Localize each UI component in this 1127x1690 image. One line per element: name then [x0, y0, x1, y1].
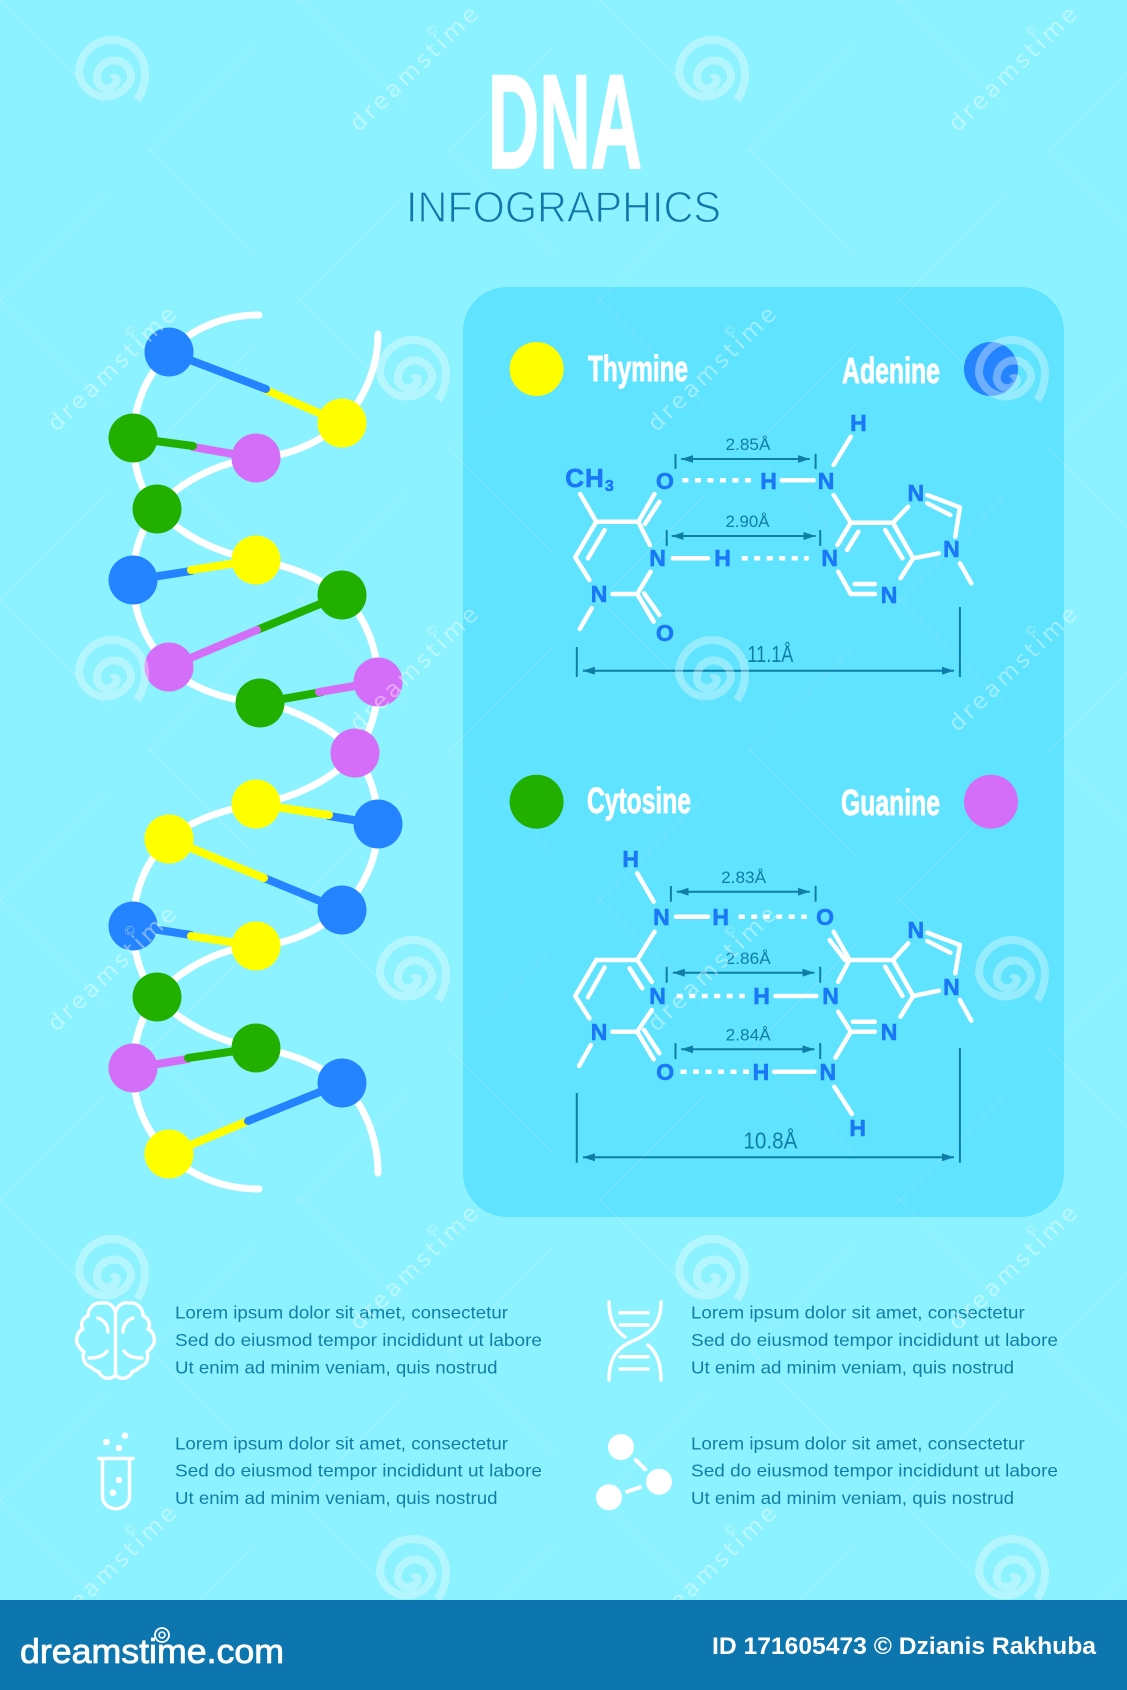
icon: molecule: [596, 1434, 672, 1510]
footer logo: dreamstime.com: [20, 1633, 284, 1671]
text block: test tube: Sed do eiusmod tempor incididunt ut labore: [175, 1461, 542, 1481]
strand two: [133, 334, 378, 1189]
atom labels: H: [712, 904, 729, 930]
atom labels: N: [649, 983, 666, 1009]
atom labels: H: [753, 983, 770, 1009]
atom labels: N: [649, 545, 666, 571]
atom labels: N: [819, 1059, 836, 1085]
atom labels: O: [656, 620, 674, 646]
atom labels: N: [907, 480, 924, 506]
bonds: [575, 437, 971, 629]
rung: guanine cytosine: [144, 570, 366, 692]
legend: thymine: Thymine: [588, 348, 688, 389]
text block: test tube: [175, 1433, 542, 1508]
atom labels: H: [753, 1059, 769, 1085]
title: DNA: [488, 48, 642, 197]
text block: test tube: Lorem ipsum dolor sit amet, consectetur: [175, 1433, 508, 1453]
text: dreamstime: [43, 1501, 182, 1636]
atom labels: O: [816, 904, 834, 930]
atom labels: N: [591, 1019, 607, 1045]
text: dreamstime: [345, 1201, 484, 1336]
footer logo spiral: [155, 1628, 169, 1642]
icon: brain: [77, 1303, 154, 1378]
footer bar: [0, 1600, 1127, 1690]
title: [406, 48, 721, 232]
text block: dna: [691, 1302, 1058, 1377]
text: ©: [121, 922, 141, 941]
distance: 10.8: 10.8Å: [743, 1126, 798, 1153]
rung: adenine thymine: [144, 328, 366, 448]
legend: cytosine: [510, 775, 691, 829]
icon: test tube: [99, 1432, 133, 1509]
base: cytosine: [132, 972, 182, 1022]
distance: 11.1: 11.1Å: [747, 640, 794, 667]
atom labels: N: [818, 468, 834, 494]
rung: adenine thymine: [108, 902, 280, 970]
atom labels: N: [822, 983, 839, 1009]
atom labels: N: [653, 904, 670, 930]
base: guanine: [330, 728, 380, 778]
atom labels: 3: [605, 478, 615, 495]
rung: thymine adenine: [144, 1058, 366, 1178]
text block: molecule: [691, 1433, 1058, 1508]
legend: guanine: Guanine: [841, 782, 940, 823]
text: ©: [423, 622, 443, 641]
rung: adenine thymine: [108, 536, 280, 604]
text block: molecule: Sed do eiusmod tempor incididunt ut labore: [691, 1461, 1058, 1481]
atom labels: H: [850, 410, 867, 436]
rung: guanine cytosine: [108, 1024, 280, 1092]
rung: thymine adenine: [232, 780, 402, 848]
chart: thymine adenine structure: [565, 410, 971, 677]
text: ©: [721, 922, 741, 941]
atom labels: N: [907, 917, 924, 943]
text block: brain: Sed do eiusmod tempor incididunt ut labore: [175, 1330, 542, 1350]
text block: brain: Lorem ipsum dolor sit amet, consectetur: [175, 1302, 508, 1322]
text block: molecule: Lorem ipsum dolor sit amet, consectetur: [691, 1433, 1025, 1453]
atom labels: N: [943, 536, 960, 562]
bonds: [575, 873, 971, 1114]
text: ©: [423, 22, 443, 41]
strand one: [133, 315, 378, 1173]
text block: dna: Sed do eiusmod tempor incididunt ut labore: [691, 1330, 1058, 1350]
text: dreamstime: [43, 902, 182, 1037]
text: ©: [1022, 22, 1042, 41]
text: dreamstime: [944, 2, 1083, 137]
icon: dna: [609, 1302, 661, 1380]
text block: dna: Ut enim ad minim veniam, quis nostrud: [691, 1357, 1014, 1377]
atom labels: H: [849, 1115, 866, 1141]
text: ©: [1022, 1221, 1042, 1240]
distance: 2.85: 2.85Å: [726, 435, 771, 454]
chart: DNA double helix: [108, 315, 402, 1189]
atom labels: N: [821, 545, 838, 571]
legend: adenine: Adenine: [842, 350, 940, 391]
text: ©: [1022, 622, 1042, 641]
atom labels: H: [760, 468, 777, 494]
text: dreamstime: [345, 2, 484, 137]
footer credit: ID 171605473 © Dzianis Rakhuba: [712, 1633, 1097, 1660]
text: ©: [721, 1521, 741, 1540]
text: dreamstime: [43, 302, 182, 437]
legend: adenine: [842, 342, 1018, 396]
text: dreamstime: [944, 602, 1083, 737]
subtitle: INFOGRAPHICS: [406, 183, 721, 232]
text: ©: [121, 1521, 141, 1540]
atom labels: CH: [565, 463, 605, 493]
atom labels: N: [943, 974, 960, 1000]
text: dreamstime: [643, 902, 782, 1037]
text block: dna: Lorem ipsum dolor sit amet, consectetur: [691, 1302, 1025, 1322]
distance: 2.84: 2.84Å: [726, 1026, 771, 1045]
atom labels: [565, 410, 960, 646]
atom labels: O: [656, 468, 674, 494]
rung: cytosine guanine: [108, 414, 280, 482]
text: dreamstime: [944, 1201, 1083, 1336]
text: dreamstime: [345, 602, 484, 737]
atom labels: N: [591, 581, 607, 607]
atom labels: H: [622, 846, 639, 872]
atom labels: O: [656, 1059, 674, 1085]
text block: test tube: Ut enim ad minim veniam, quis nostrud: [175, 1488, 498, 1508]
text: ©: [423, 1221, 443, 1240]
legend: guanine: [841, 775, 1018, 829]
rung: cytosine guanine: [236, 658, 402, 728]
distance: 2.90: 2.90Å: [726, 512, 770, 531]
atom labels: [591, 846, 960, 1141]
distance: 2.86: 2.86Å: [726, 949, 771, 968]
text block: brain: Ut enim ad minim veniam, quis nostrud: [175, 1357, 498, 1377]
text block: molecule: Ut enim ad minim veniam, quis nostrud: [691, 1488, 1014, 1508]
rung: thymine adenine: [144, 814, 366, 934]
legend: thymine: [510, 342, 688, 396]
legend: cytosine: Cytosine: [587, 780, 691, 821]
text block: brain: [175, 1302, 542, 1377]
distance: 2.83: 2.83Å: [721, 868, 767, 887]
chart: cytosine guanine structure: [575, 846, 971, 1163]
base: cytosine: [132, 484, 182, 534]
text: ©: [121, 322, 141, 341]
atom labels: N: [881, 1019, 897, 1045]
text: ©: [721, 322, 741, 341]
atom labels: N: [881, 582, 897, 608]
atom labels: H: [714, 545, 731, 571]
text: dreamstime: [643, 1501, 782, 1636]
panel: base pairs: [463, 287, 1064, 1217]
text: dreamstime: [643, 302, 782, 437]
